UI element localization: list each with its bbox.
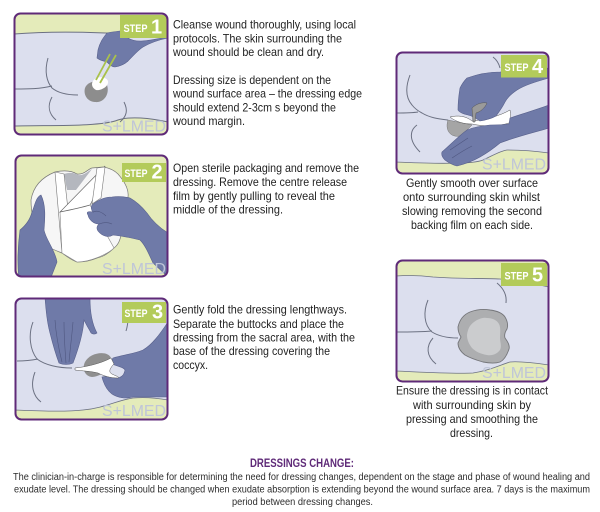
icon: gloved hand (97, 31, 168, 67)
step badge 2: 2 (152, 162, 163, 184)
text: step 1 instructions: Cleanse wound thoroughly, using local (173, 18, 356, 32)
panel: step 4 illustration (396, 52, 549, 174)
panel: step 1 illustration (14, 13, 168, 136)
icon: wound and dressing (447, 120, 472, 136)
icon: backing film tab (472, 103, 487, 122)
watermark: S+LMED (482, 365, 546, 382)
step badge 3: 3 (152, 302, 163, 324)
text: step 1 instructions: Dressing size is dependent on the (173, 74, 331, 87)
text: step 5 instructions: pressing and smoothing the (406, 413, 538, 426)
step badge 4: 4 (532, 56, 544, 78)
icon: folded dressing (75, 358, 119, 378)
icon: wound and dressing (84, 353, 111, 377)
text: step 4 instructions (402, 177, 542, 232)
watermark: S+LMED (102, 403, 166, 420)
watermark: S+LMED (102, 261, 166, 278)
text: step 4 instructions: backing film on each side. (411, 219, 533, 232)
text: step 2 instructions: Open sterile packaging and remove the (173, 162, 359, 175)
icon: gauze (92, 77, 108, 90)
step badge 2: STEP (124, 168, 148, 180)
text: step 1 instructions: wound should be clean and dry. (172, 46, 324, 59)
text: step 1 instructions: should extend 2-3cm s beyond the (173, 102, 336, 114)
text: dressing change guidance: period between dressing changes. (232, 497, 373, 508)
text: step 3 instructions: base of the dressing covering the (173, 345, 330, 358)
text: step 1 instructions: wound margin. (172, 115, 245, 128)
icon: left gloved hand (18, 195, 57, 280)
step badge 5: 5 (532, 264, 543, 286)
icon: upper gloved hand (458, 68, 549, 121)
panel: step 2 illustration (15, 155, 168, 280)
watermark: S+LMED (102, 118, 166, 136)
text: step 5 instructions: dressing. (450, 427, 493, 440)
text: step 4 instructions: Gently smooth over surface (406, 177, 538, 190)
text: step 1 instructions: protocols. The skin surrounding the (173, 32, 342, 46)
text: step 3 instructions: Separate the buttocks and place the (173, 318, 344, 331)
step badge 4: STEP (504, 62, 528, 74)
icon: dressing (31, 167, 128, 262)
step badge 4 (501, 55, 547, 78)
text: step 1 instructions: wound surface area – the dressing edge (172, 88, 362, 100)
step badge 1: STEP (124, 23, 148, 35)
text: step 5 instructions (396, 384, 549, 440)
text: step 3 instructions: coccyx. (173, 359, 208, 372)
text: step 3 instructions (173, 304, 355, 372)
text: step 3 instructions: Gently fold the dressing lengthways. (173, 304, 347, 316)
text: step 5 instructions: Ensure the dressing is in contact (396, 384, 549, 398)
step badge 3 (122, 302, 166, 324)
heading: dressings change: DRESSINGS CHANGE: (250, 458, 354, 470)
text: step 2 instructions: film by gently pulling to reveal the (173, 190, 335, 203)
icon: applied dressing (458, 309, 509, 363)
icon: folded film (60, 166, 105, 212)
step badge 5: STEP (504, 270, 528, 282)
icon: wound (85, 81, 108, 102)
step badge 5 (501, 263, 547, 286)
step badge 3: STEP (124, 308, 148, 320)
icon: right gloved hand (87, 197, 168, 277)
text: step 2 instructions: dressing. Remove the centre release (173, 176, 347, 189)
icon: tweezers (96, 54, 116, 83)
step badge 2 (122, 163, 166, 182)
icon: top gloved hand (45, 298, 97, 364)
text: step 3 instructions: dressing from the sacral area, with the (173, 332, 355, 344)
text: step 4 instructions: onto surrounding skin whilst (403, 191, 541, 204)
step badge 1 (120, 15, 167, 38)
step badge 1: 1 (151, 16, 162, 38)
watermark: S+LMED (482, 156, 546, 174)
text: step 2 instructions (173, 162, 359, 216)
text: step 5 instructions: with surrounding skin by (412, 399, 531, 412)
panel: step 3 illustration (15, 298, 168, 420)
text: step 2 instructions: middle of the dressing. (173, 204, 283, 216)
text: step 4 instructions: slowing removing the second (402, 205, 542, 218)
text: step 1 instructions (172, 18, 362, 128)
panel: step 5 illustration (396, 260, 549, 382)
icon: lower gloved hand (442, 105, 549, 166)
icon: right gloved hand (102, 322, 168, 398)
text: dressing change guidance (13, 472, 590, 508)
